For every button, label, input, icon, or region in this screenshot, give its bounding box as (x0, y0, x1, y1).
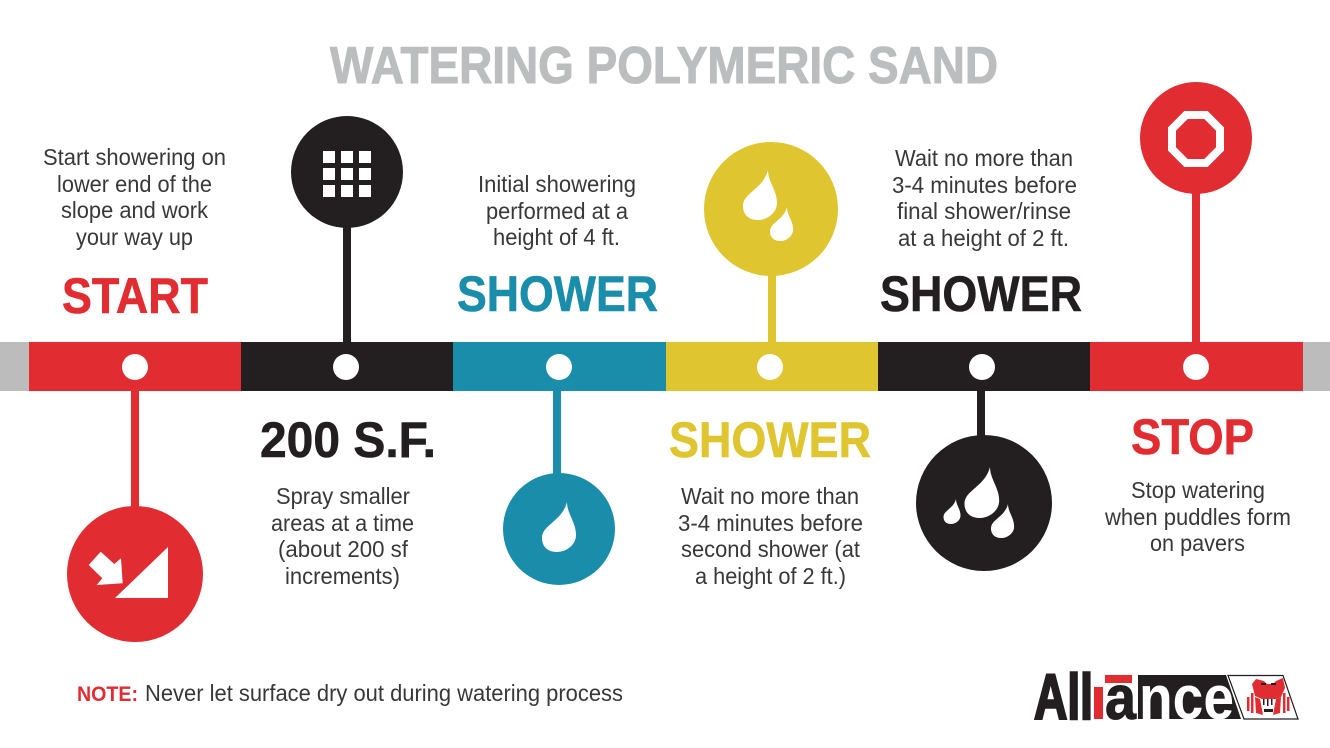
second shower description: a height of 2 ft.) (695, 563, 846, 589)
first shower description (478, 171, 636, 250)
final shower description: Wait no more than (895, 145, 1073, 171)
first shower heading: SHOWER (457, 266, 658, 322)
stop description: when puddles form (1104, 504, 1291, 530)
icon: three drops (916, 435, 1052, 571)
step 1: start (43, 144, 226, 642)
stop description (1104, 477, 1291, 556)
stem (343, 226, 351, 342)
second shower heading: SHOWER (669, 412, 871, 468)
icon: stop octagon (1140, 82, 1252, 194)
200 s.f. description: (about 200 sf (278, 536, 409, 562)
stem (768, 274, 776, 342)
start description: slope and work (61, 197, 208, 223)
logo: Alliance (1034, 661, 1298, 733)
icon: grid (291, 116, 403, 228)
logo: Alliance: a (1105, 664, 1136, 733)
icon: single drop (503, 473, 615, 585)
start description: your way up (76, 224, 193, 250)
second shower description: second shower (at (681, 536, 861, 562)
final shower description: 3-4 minutes before (892, 172, 1077, 198)
icon: slope with arrow (67, 506, 203, 642)
logo: Alliance: All (1034, 661, 1093, 733)
200 s.f. heading: 200 S.F. (260, 412, 436, 468)
stem (553, 391, 561, 477)
200 s.f. description: areas at a time (271, 510, 414, 536)
200 s.f. description (271, 483, 414, 589)
step 6: stop (1104, 82, 1291, 556)
first shower description: performed at a (486, 198, 628, 224)
200 s.f. description: increments) (285, 563, 400, 589)
final shower heading: SHOWER (880, 266, 1082, 322)
title: WATERING POLYMERIC SAND (330, 37, 998, 95)
icon: red dragon mascot (1247, 678, 1290, 715)
first shower description: height of 4 ft. (493, 224, 620, 250)
final shower description: at a height of 2 ft. (898, 225, 1069, 251)
200 s.f. description: Spray smaller (276, 483, 410, 509)
second shower description (678, 483, 863, 589)
final shower description (892, 145, 1077, 251)
start description: lower end of the (57, 171, 212, 197)
start heading: START (62, 268, 208, 324)
start description (43, 144, 226, 250)
second shower description: 3-4 minutes before (678, 510, 863, 536)
stem (131, 391, 139, 511)
stop description: on pavers (1150, 530, 1245, 556)
stop description: Stop watering (1131, 477, 1265, 503)
start description: Start showering on (43, 144, 226, 170)
timeline bar (0, 342, 1330, 391)
final shower description: final shower/rinse (897, 198, 1071, 224)
logo: Alliance: nce (1139, 664, 1234, 733)
note: NOTE: (77, 683, 138, 706)
stem (1192, 192, 1200, 342)
step 4: second shower (669, 142, 871, 589)
stop heading: STOP (1131, 409, 1254, 465)
stem (977, 391, 985, 441)
step 3: first shower (457, 171, 658, 585)
first shower description: Initial showering (478, 171, 636, 197)
step 5: final shower (880, 145, 1082, 571)
second shower description: Wait no more than (681, 483, 859, 509)
note: Never let surface dry out during watering process (145, 680, 623, 706)
icon: two drops (704, 142, 838, 276)
step 2: 200 s.f. (260, 116, 436, 589)
